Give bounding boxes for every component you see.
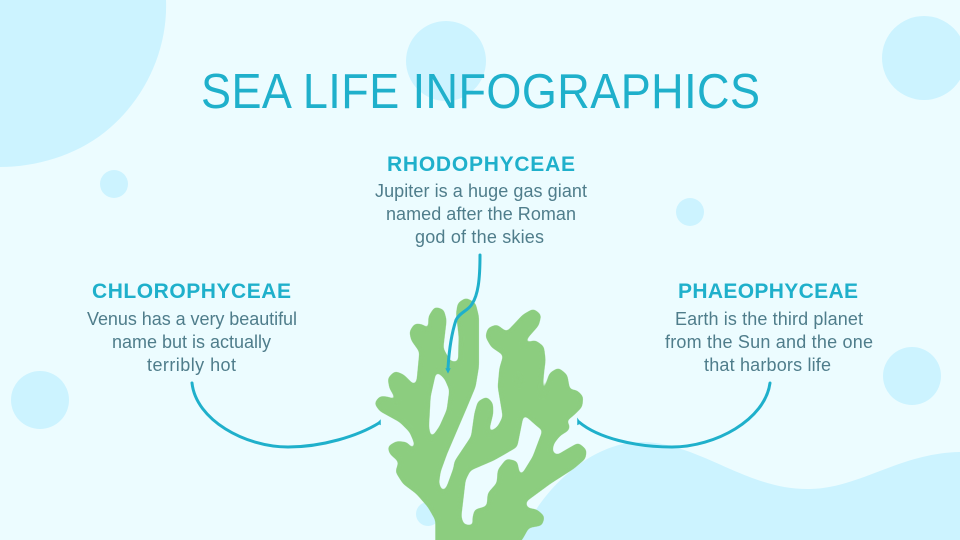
icon: green seaweed coral — [375, 298, 586, 540]
heading: PHAEOPHYCEAE — [678, 280, 858, 303]
description — [87, 309, 297, 375]
text block: Phaeophyceae — [665, 280, 873, 375]
description: Venus has a very beautiful — [87, 309, 297, 329]
description: from the Sun and the one — [665, 332, 873, 352]
description: name but is actually — [112, 332, 271, 352]
description — [375, 181, 587, 247]
heading: CHLOROPHYCEAE — [92, 280, 291, 303]
description: Earth is the third planet — [675, 309, 863, 329]
description: terribly hot — [147, 355, 236, 375]
description: Jupiter is a huge gas giant — [375, 181, 587, 201]
heading: RHODOPHYCEAE — [387, 153, 575, 176]
title: SEA LIFE INFOGRAPHICS — [201, 63, 760, 118]
description: that harbors life — [704, 355, 831, 375]
arrow: from Chlorophyceae to coral — [192, 383, 380, 447]
text block: Rhodophyceae — [375, 153, 587, 247]
description — [665, 309, 873, 375]
arrow: from Rhodophyceae to coral — [446, 255, 480, 372]
text block: Chlorophyceae — [87, 280, 297, 375]
arrow: from Phaeophyceae to coral — [578, 383, 770, 447]
description: named after the Roman — [386, 204, 576, 224]
description: god of the skies — [415, 227, 544, 247]
